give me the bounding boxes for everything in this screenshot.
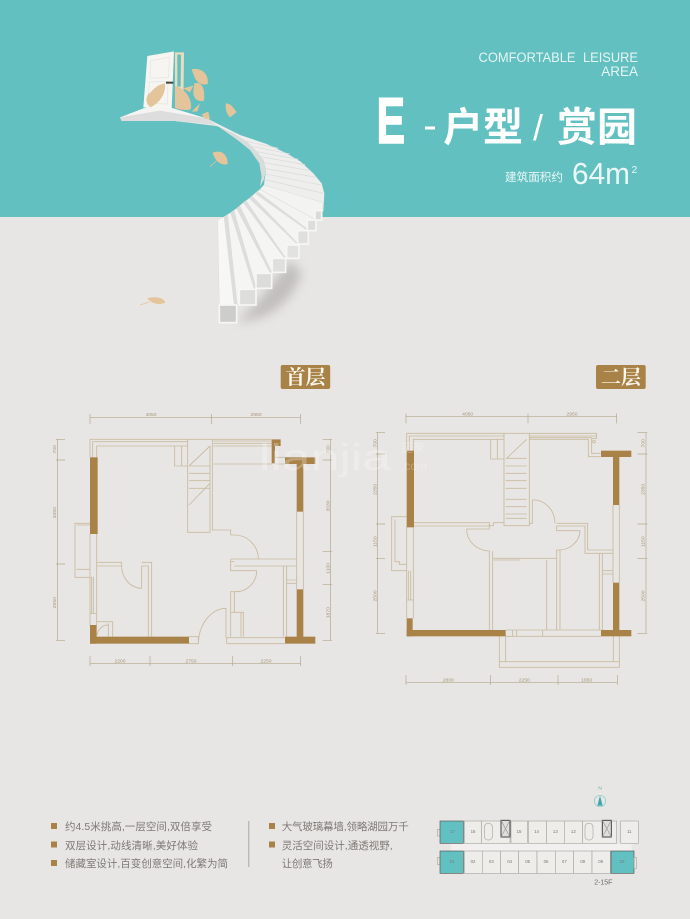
divider xyxy=(248,821,249,867)
bottom row units: 06 xyxy=(544,859,549,864)
subtitle: COMFORTABLE LEISURE AREA: AREA xyxy=(601,64,638,79)
bottom row units: 04 xyxy=(507,859,513,864)
floor plan: second floor xyxy=(373,411,647,685)
floating platform xyxy=(120,104,217,125)
area: 建筑面积约 64m²: 2 xyxy=(632,164,638,176)
dimension lines: 2800 xyxy=(443,678,454,684)
dimension lines: 700 xyxy=(325,445,331,453)
subtitle: COMFORTABLE LEISURE AREA xyxy=(478,50,638,79)
illustration: spiral staircase with door and ginkgo leaves xyxy=(120,51,324,323)
dimension lines: 2350 xyxy=(641,484,647,495)
top row units: 17 xyxy=(450,829,455,834)
feature list: right column xyxy=(269,820,409,870)
top row units: 13 xyxy=(553,829,558,834)
dimension lines: 1950 xyxy=(581,678,592,684)
dimension lines: 700 xyxy=(52,445,58,453)
top row units: 11 xyxy=(627,829,632,834)
compass xyxy=(594,785,606,807)
lower stair fan xyxy=(218,185,323,323)
feature list: left column: 储藏室设计,百变创意空间,化繁为简 xyxy=(65,857,228,870)
dimension lines: 2250 xyxy=(260,659,272,665)
dimension lines: 700 xyxy=(641,439,647,447)
label: 首层: 首层 xyxy=(286,361,326,390)
area: 建筑面积约 64m²: 64m xyxy=(572,156,630,191)
label: 二层: 二层 xyxy=(601,361,642,390)
dimension lines: 2350 xyxy=(373,484,379,495)
feature list: left column xyxy=(51,820,228,870)
interior walls xyxy=(392,433,619,667)
title: E-户型/赏园: 赏园 xyxy=(557,95,637,153)
dimension lines: 2500 xyxy=(373,590,379,602)
dimension lines xyxy=(52,412,332,666)
top row units: 14 xyxy=(534,829,540,834)
stair shadow xyxy=(237,260,302,322)
feature list: right column: 让创意飞扬 xyxy=(282,857,333,870)
bottom row units: 07 xyxy=(562,859,567,864)
top row units xyxy=(437,820,638,843)
bottom row units: 09 xyxy=(598,859,604,864)
area: 建筑面积约 64m²: 建筑面积约 xyxy=(505,169,563,185)
compass: N xyxy=(598,785,602,791)
key plan: building floor plate 2-15F xyxy=(437,785,638,887)
watermark xyxy=(259,437,427,478)
dimension lines xyxy=(373,411,647,685)
structural walls (gold) xyxy=(407,451,631,636)
dimension lines: 2200 xyxy=(114,659,126,665)
dimension lines: 3450 xyxy=(52,507,58,518)
structural walls (gold) xyxy=(90,439,315,644)
upper stair flight xyxy=(175,118,324,212)
area: 建筑面积约 64m² xyxy=(505,156,638,191)
subtitle: COMFORTABLE LEISURE AREA: COMFORTABLE xyxy=(478,50,576,65)
bottom row units xyxy=(437,851,637,873)
door xyxy=(143,51,184,109)
feature list: left column: 约4.5米挑高,一层空间,双倍享受 xyxy=(65,820,212,833)
interior walls xyxy=(75,439,303,644)
bottom row units: 10 xyxy=(620,859,625,864)
watermark: .com xyxy=(401,459,427,473)
dimension lines: 2550 xyxy=(52,597,58,608)
watermark: 链家 xyxy=(401,439,425,456)
dimension lines: 2250 xyxy=(519,678,530,684)
feature list: right column: 灵活空间设计,通透视野, xyxy=(282,839,393,852)
bottom row units: 05 xyxy=(525,859,531,864)
ginkgo leaves xyxy=(140,69,237,305)
dimension lines: 4050 xyxy=(145,412,157,418)
feature list: right column: 大气玻璃幕墙,领略湖园万千 xyxy=(282,820,409,833)
floor plan: ground floor xyxy=(52,412,332,666)
bottom row units: 02 xyxy=(471,859,476,864)
top row units: 15 xyxy=(517,829,522,834)
dimension lines: 3030 xyxy=(325,500,331,512)
dimension lines: 2750 xyxy=(185,659,197,665)
dimension lines: 700 xyxy=(373,439,379,447)
dimension lines: 2500 xyxy=(641,590,647,602)
dimension lines: 1870 xyxy=(325,607,331,618)
corridor xyxy=(451,843,632,851)
title: E-户型/赏园 xyxy=(376,84,637,157)
dimension lines: 1150 xyxy=(641,536,647,547)
bottom row units: 08 xyxy=(580,859,586,864)
bottom row units: 01 xyxy=(450,859,455,864)
top row units: 12 xyxy=(571,829,576,834)
dimension lines: 2950 xyxy=(250,412,262,418)
dimension lines: 4050 xyxy=(462,411,473,417)
dimension lines: 1150 xyxy=(373,536,379,547)
dimension lines: 2950 xyxy=(566,411,578,417)
dimension lines: 1100 xyxy=(325,563,331,574)
title: E-户型/赏园: 户型 xyxy=(443,95,523,153)
top row units: 16 xyxy=(471,829,476,834)
teal header band xyxy=(0,0,690,217)
title: E-户型/赏园: E xyxy=(376,84,405,157)
watermark: lianjia xyxy=(259,437,392,478)
subtitle: COMFORTABLE LEISURE AREA: LEISURE xyxy=(583,50,638,65)
feature list: left column: 双层设计,动线清晰,美好体验 xyxy=(65,839,198,852)
title: E-户型/赏园: / xyxy=(533,107,543,148)
floor range label: 2-15F xyxy=(594,880,612,887)
bottom row units: 03 xyxy=(489,859,494,864)
